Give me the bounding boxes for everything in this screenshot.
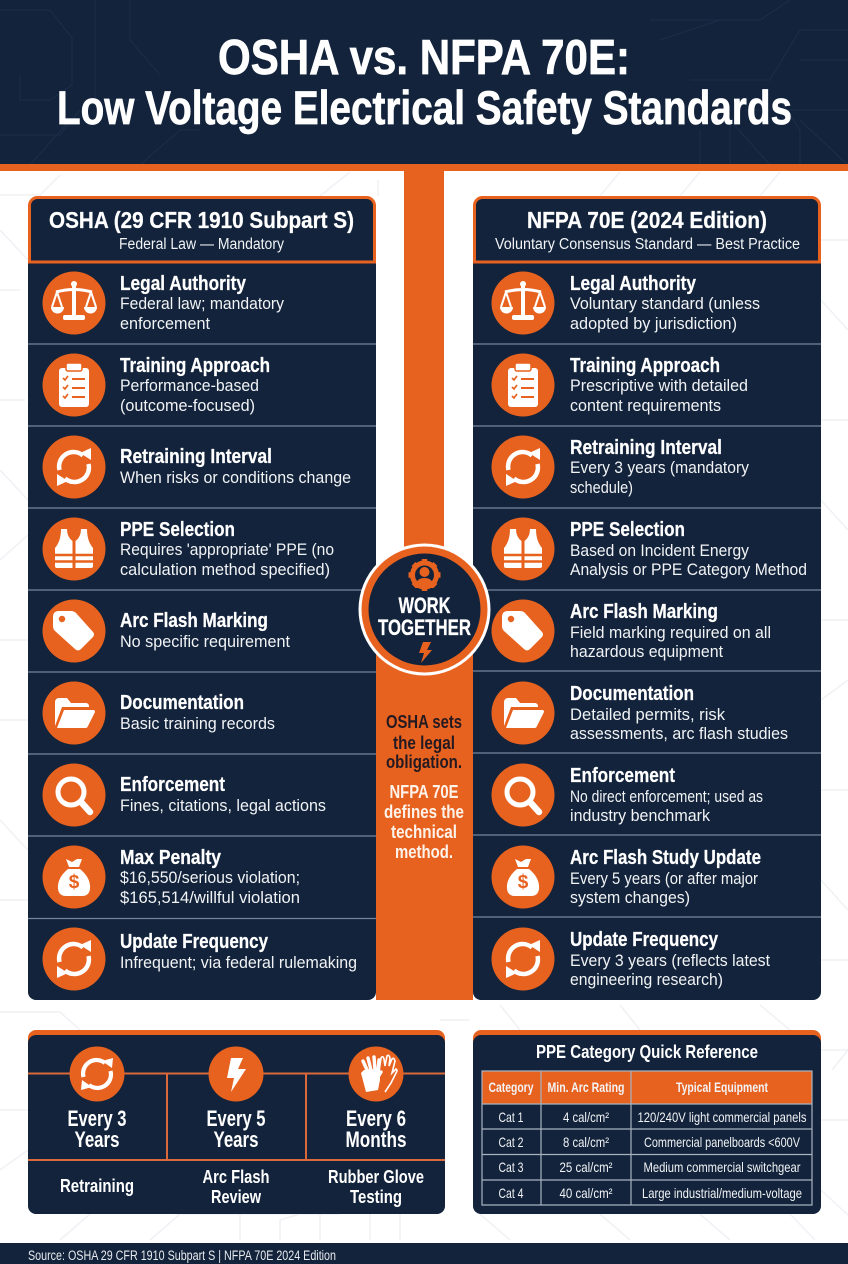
row: PPE Selection: Requires 'appropriate' PPE (no [120, 540, 334, 559]
row: Enforcement: Enforcement [570, 765, 675, 787]
footer: Source: OSHA 29 CFR 1910 Subpart S | NFPA 70E 2024 Edition [28, 1248, 336, 1263]
row: Arc Flash Marking: Arc Flash Marking [120, 610, 268, 632]
row: Retraining Interval: When risks or conditions change [120, 468, 351, 487]
row: Enforcement [42, 764, 326, 826]
row: Enforcement: Enforcement [120, 774, 225, 796]
center note: technical [391, 822, 457, 842]
interval: rubber glove testing: Rubber Glove [328, 1167, 424, 1187]
row: Retraining Interval [492, 436, 749, 498]
row: Arc Flash Study Update [492, 846, 761, 908]
row: Documentation [42, 682, 275, 744]
interval: rubber glove testing [328, 1046, 424, 1207]
row: Documentation: Documentation [120, 692, 244, 714]
row: Training Approach: (outcome-focused) [120, 396, 255, 415]
row: Training Approach [42, 354, 270, 416]
header band [0, 0, 848, 165]
row: Update Frequency: Every 3 years (reflects latest [570, 951, 770, 970]
work together badge: TOGETHER [378, 615, 471, 640]
row: Legal Authority: Federal law; mandatory [120, 294, 284, 313]
interval: arc flash review: Every 5 [206, 1106, 266, 1131]
row: Retraining Interval: Every 3 years (mandatory [570, 458, 749, 477]
row: PPE Selection: Analysis or PPE Category Method [570, 560, 807, 579]
center note: OSHA sets [386, 712, 462, 732]
row: Update Frequency: engineering research) [570, 970, 723, 989]
work together badge [358, 544, 490, 676]
row: Documentation [492, 682, 788, 744]
row: Legal Authority: Legal Authority [120, 273, 247, 295]
row: Max Penalty: Max Penalty [120, 847, 222, 869]
row: PPE Selection: PPE Selection [570, 519, 685, 541]
NFPA panel header [474, 197, 820, 262]
title [57, 31, 792, 134]
row: Update Frequency: Update Frequency [120, 931, 269, 953]
row: Training Approach: Prescriptive with detailed [570, 376, 748, 395]
icon: lightning bolt [419, 642, 432, 663]
table: 25 cal/cm² [560, 1159, 613, 1175]
table: Medium commercial switchgear [644, 1159, 801, 1175]
row: Training Approach: Training Approach [120, 355, 270, 377]
row: Legal Authority: Voluntary standard (unless [570, 294, 760, 313]
row: Update Frequency [492, 928, 770, 990]
row: PPE Selection: PPE Selection [120, 519, 235, 541]
icon: gear with person [408, 559, 440, 591]
table: 8 cal/cm² [563, 1134, 609, 1150]
interval: rubber glove testing: Every 6 [346, 1106, 406, 1131]
table: 4 cal/cm² [563, 1109, 609, 1125]
table: Typical Equipment [676, 1079, 768, 1095]
row: Legal Authority: adopted by jurisdiction) [570, 314, 737, 333]
row: Enforcement: industry benchmark [570, 806, 710, 825]
panel: intervals [28, 1030, 445, 1214]
OSHA panel header: Federal Law — Mandatory [119, 236, 284, 253]
row: Arc Flash Marking [492, 600, 771, 662]
table: Cat 1 [498, 1109, 524, 1125]
row: Training Approach [492, 354, 748, 416]
work together badge: WORK [398, 593, 451, 618]
row: Arc Flash Study Update: system changes) [570, 888, 690, 907]
row: Arc Flash Marking: Arc Flash Marking [570, 601, 718, 623]
row: Documentation: assessments, arc flash studies [570, 724, 788, 743]
title: OSHA vs. NFPA 70E: [218, 31, 630, 85]
center note: NFPA 70E [390, 782, 458, 802]
row: Update Frequency: Update Frequency [570, 929, 719, 951]
interval: arc flash review [202, 1046, 270, 1207]
NFPA panel header: NFPA 70E (2024 Edition) [527, 207, 767, 233]
row: Legal Authority: enforcement [120, 314, 210, 333]
row: Retraining Interval: schedule) [570, 478, 633, 497]
row: Arc Flash Marking: hazardous equipment [570, 642, 723, 661]
OSHA panel header: OSHA (29 CFR 1910 Subpart S) [49, 207, 354, 233]
row: Documentation: Detailed permits, risk [570, 705, 725, 724]
interval: retraining: Years [74, 1127, 120, 1152]
panel: PPE category table [473, 1030, 821, 1214]
row: Arc Flash Study Update: Arc Flash Study Update [570, 847, 761, 869]
interval: arc flash review: Arc Flash [202, 1167, 270, 1187]
table: Min. Arc Rating [548, 1079, 624, 1095]
circuit pattern, header [0, 0, 848, 165]
interval: arc flash review: Review [211, 1187, 262, 1207]
OSHA panel header [30, 197, 374, 262]
panel: OSHA [28, 197, 376, 1000]
table [482, 1071, 812, 1205]
interval: retraining: Retraining [60, 1176, 134, 1196]
row: Arc Flash Marking: No specific requirement [120, 632, 290, 651]
center note: defines the [384, 802, 464, 822]
interval: retraining [60, 1046, 134, 1196]
NFPA panel header: Voluntary Consensus Standard — Best Practice [495, 236, 800, 253]
row: Enforcement: Fines, citations, legal actions [120, 796, 326, 815]
row: PPE Selection [492, 518, 807, 580]
center note: obligation. [386, 752, 462, 772]
row: Update Frequency [42, 928, 357, 990]
interval: rubber glove testing: Testing [350, 1187, 402, 1207]
table: Large industrial/medium-voltage [642, 1185, 802, 1201]
table: Cat 3 [498, 1159, 524, 1175]
row: Update Frequency: Infrequent; via federal rulemaking [120, 953, 357, 972]
center note: the legal [393, 733, 455, 753]
row: PPE Selection [42, 518, 334, 580]
row: Enforcement [492, 764, 763, 826]
row: Documentation: Basic training records [120, 714, 275, 733]
row: Arc Flash Study Update: Every 5 years (or after major [570, 869, 758, 888]
table: Commercial panelboards <600V [644, 1134, 801, 1150]
center note: method. [395, 842, 453, 862]
table: Cat 4 [498, 1185, 524, 1201]
row: Legal Authority [42, 272, 284, 334]
center note [384, 712, 464, 862]
row: Legal Authority [492, 272, 760, 334]
table: 40 cal/cm² [560, 1185, 613, 1201]
panel: NFPA 70E [473, 197, 821, 1000]
row: Arc Flash Marking [42, 600, 290, 662]
row: Max Penalty: $16,550/serious violation; [120, 868, 300, 887]
footer [0, 1243, 848, 1264]
row: PPE Selection: calculation method specified) [120, 560, 330, 579]
row: Retraining Interval [42, 436, 351, 498]
table: Cat 2 [498, 1134, 524, 1150]
table: 120/240V light commercial panels [638, 1109, 806, 1125]
row: Training Approach: Training Approach [570, 355, 720, 377]
row: Retraining Interval: Retraining Interval [120, 446, 272, 468]
row: Max Penalty [42, 846, 300, 908]
interval: arc flash review: Years [214, 1127, 258, 1152]
table: Category [488, 1079, 534, 1095]
row: Retraining Interval: Retraining Interval [570, 437, 722, 459]
row: Arc Flash Marking: Field marking required on all [570, 623, 771, 642]
row: Documentation: Documentation [570, 683, 694, 705]
row: Training Approach: Performance-based [120, 376, 259, 395]
row: PPE Selection: Based on Incident Energy [570, 541, 749, 560]
row: Max Penalty: $165,514/willful violation [120, 888, 300, 907]
interval: rubber glove testing: Months [346, 1127, 406, 1152]
row: Legal Authority: Legal Authority [570, 273, 697, 295]
table heading: PPE Category Quick Reference [536, 1042, 758, 1062]
row: Enforcement: No direct enforcement; used as [570, 787, 763, 806]
row: Training Approach: content requirements [570, 396, 721, 415]
center orange column [376, 171, 473, 1000]
interval: retraining: Every 3 [68, 1106, 126, 1131]
orange header rule [0, 164, 848, 171]
